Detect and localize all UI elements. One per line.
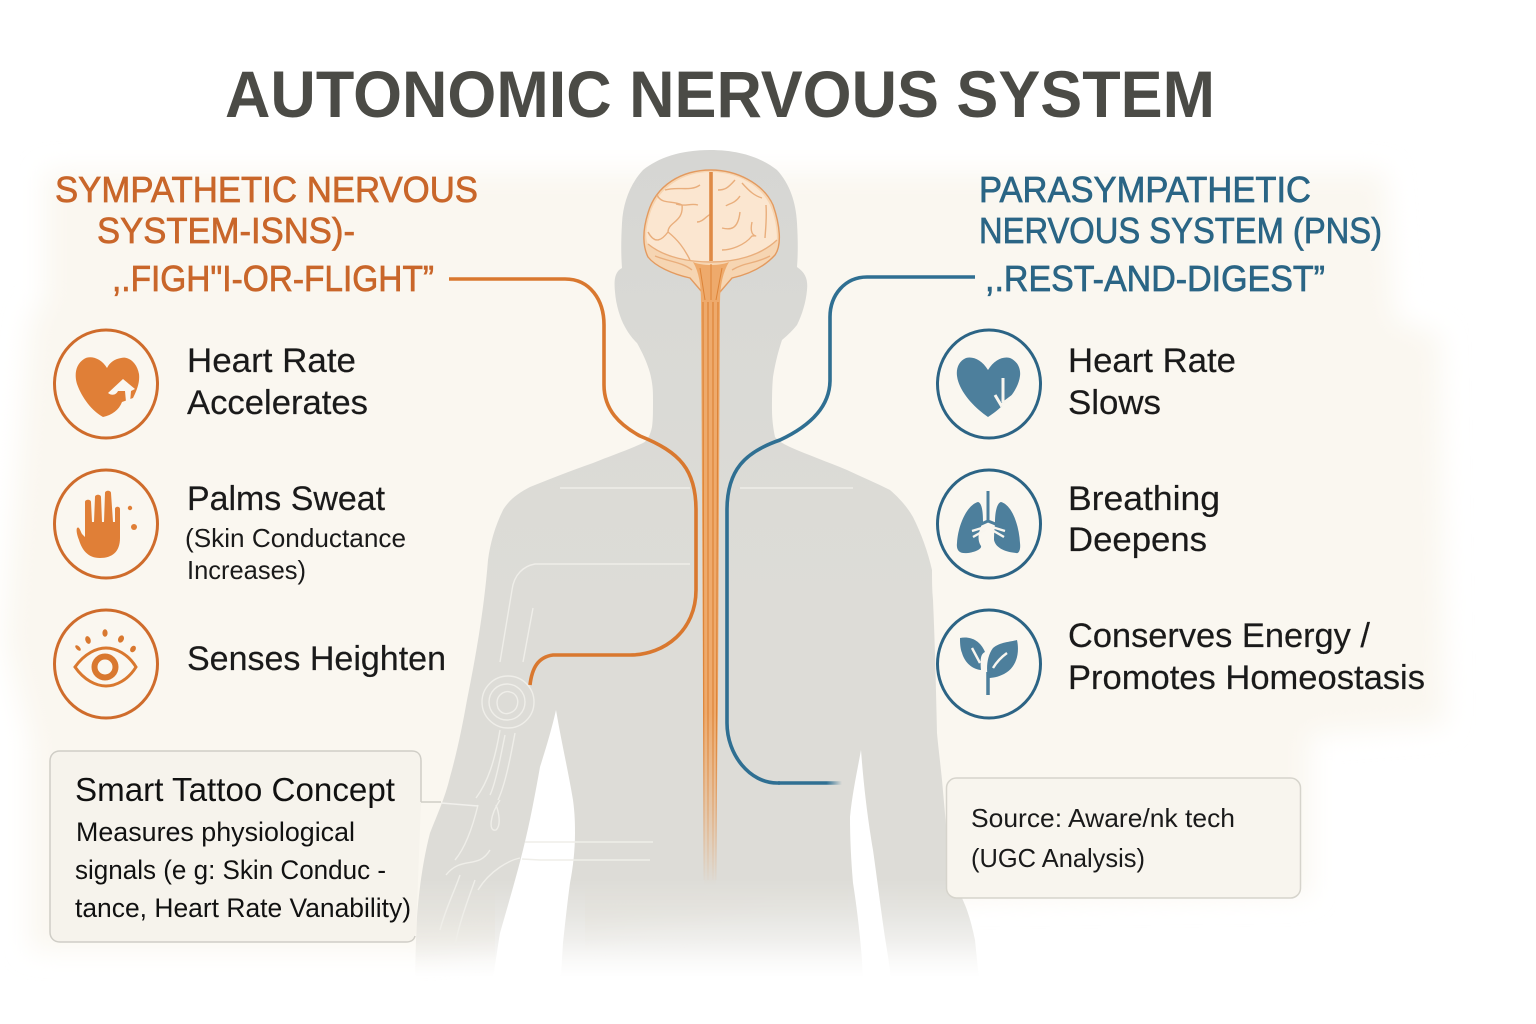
text: palms sweat: (Skin Conductance	[185, 523, 406, 553]
heading: sympathetic	[55, 169, 478, 299]
icon: heart rate up	[54, 330, 158, 438]
callout: source	[946, 778, 1300, 898]
text: palms sweat: Increases)	[187, 555, 306, 585]
text: palms sweat: Palms Sweat	[187, 480, 386, 518]
text: senses heighten: Senses Heighten	[187, 640, 446, 678]
white gaps between arms and torso	[495, 700, 1060, 1024]
human silhouette	[415, 150, 980, 990]
icon: hand sweat	[54, 470, 158, 578]
heading: sympathetic: SYMPATHETIC NERVOUS	[55, 169, 478, 210]
text: heart rate slows: Slows	[1068, 384, 1161, 422]
parasympathetic nerve line	[727, 277, 975, 783]
sympathetic nerve line	[449, 279, 696, 685]
text: breathing deepens	[1068, 480, 1220, 559]
callout: smart tattoo concept: Smart Tattoo Concept	[75, 771, 395, 808]
text: breathing deepens: Breathing	[1068, 480, 1220, 518]
icon: leaves	[938, 610, 1040, 718]
spinal cord	[701, 300, 720, 885]
heading: parasympathetic: PARASYMPATHETIC	[979, 169, 1311, 210]
heading: sympathetic: ,.FIGH"I-OR-FLIGHT”	[112, 258, 434, 299]
cream background wash	[5, 172, 1445, 950]
text: breathing deepens: Deepens	[1068, 521, 1207, 559]
text: conserves energy	[1068, 617, 1425, 697]
callout: source: Source: Aware/nk tech	[971, 803, 1235, 833]
icon: lungs	[938, 470, 1040, 578]
callout: smart tattoo concept: signals (e g: Skin Conduc -	[75, 855, 386, 885]
smart tattoo lines on arm	[440, 488, 853, 945]
brain	[644, 170, 779, 292]
text: heart rate slows: Heart Rate	[1068, 342, 1236, 380]
icon: heart rate down	[938, 330, 1040, 438]
text: palms sweat	[185, 480, 406, 585]
heading: parasympathetic	[979, 169, 1382, 299]
text: conserves energy: Conserves Energy /	[1068, 617, 1371, 655]
brain and spinal cord	[644, 170, 779, 885]
callout: smart tattoo concept: Measures physiological	[76, 817, 355, 847]
text: heart rate accelerates: Heart Rate	[187, 342, 356, 380]
heading: sympathetic: SYSTEM-ISNS)-	[97, 210, 355, 251]
heading: parasympathetic: ,.REST-AND-DIGEST”	[985, 258, 1325, 299]
callout: smart tattoo concept	[50, 751, 478, 942]
text: heart rate slows	[1068, 342, 1236, 422]
text: heart rate accelerates	[187, 342, 368, 422]
callout: smart tattoo concept: tance, Heart Rate Vanability)	[75, 893, 411, 923]
icon: eye	[54, 610, 158, 718]
heading: parasympathetic: NERVOUS SYSTEM (PNS)	[979, 210, 1382, 251]
text: heart rate accelerates: Accelerates	[187, 384, 368, 422]
callout: source: (UGC Analysis)	[971, 843, 1145, 873]
text: conserves energy: Promotes Homeostasis	[1068, 659, 1425, 697]
title: AUTONOMIC NERVOUS SYSTEM	[225, 57, 1215, 131]
